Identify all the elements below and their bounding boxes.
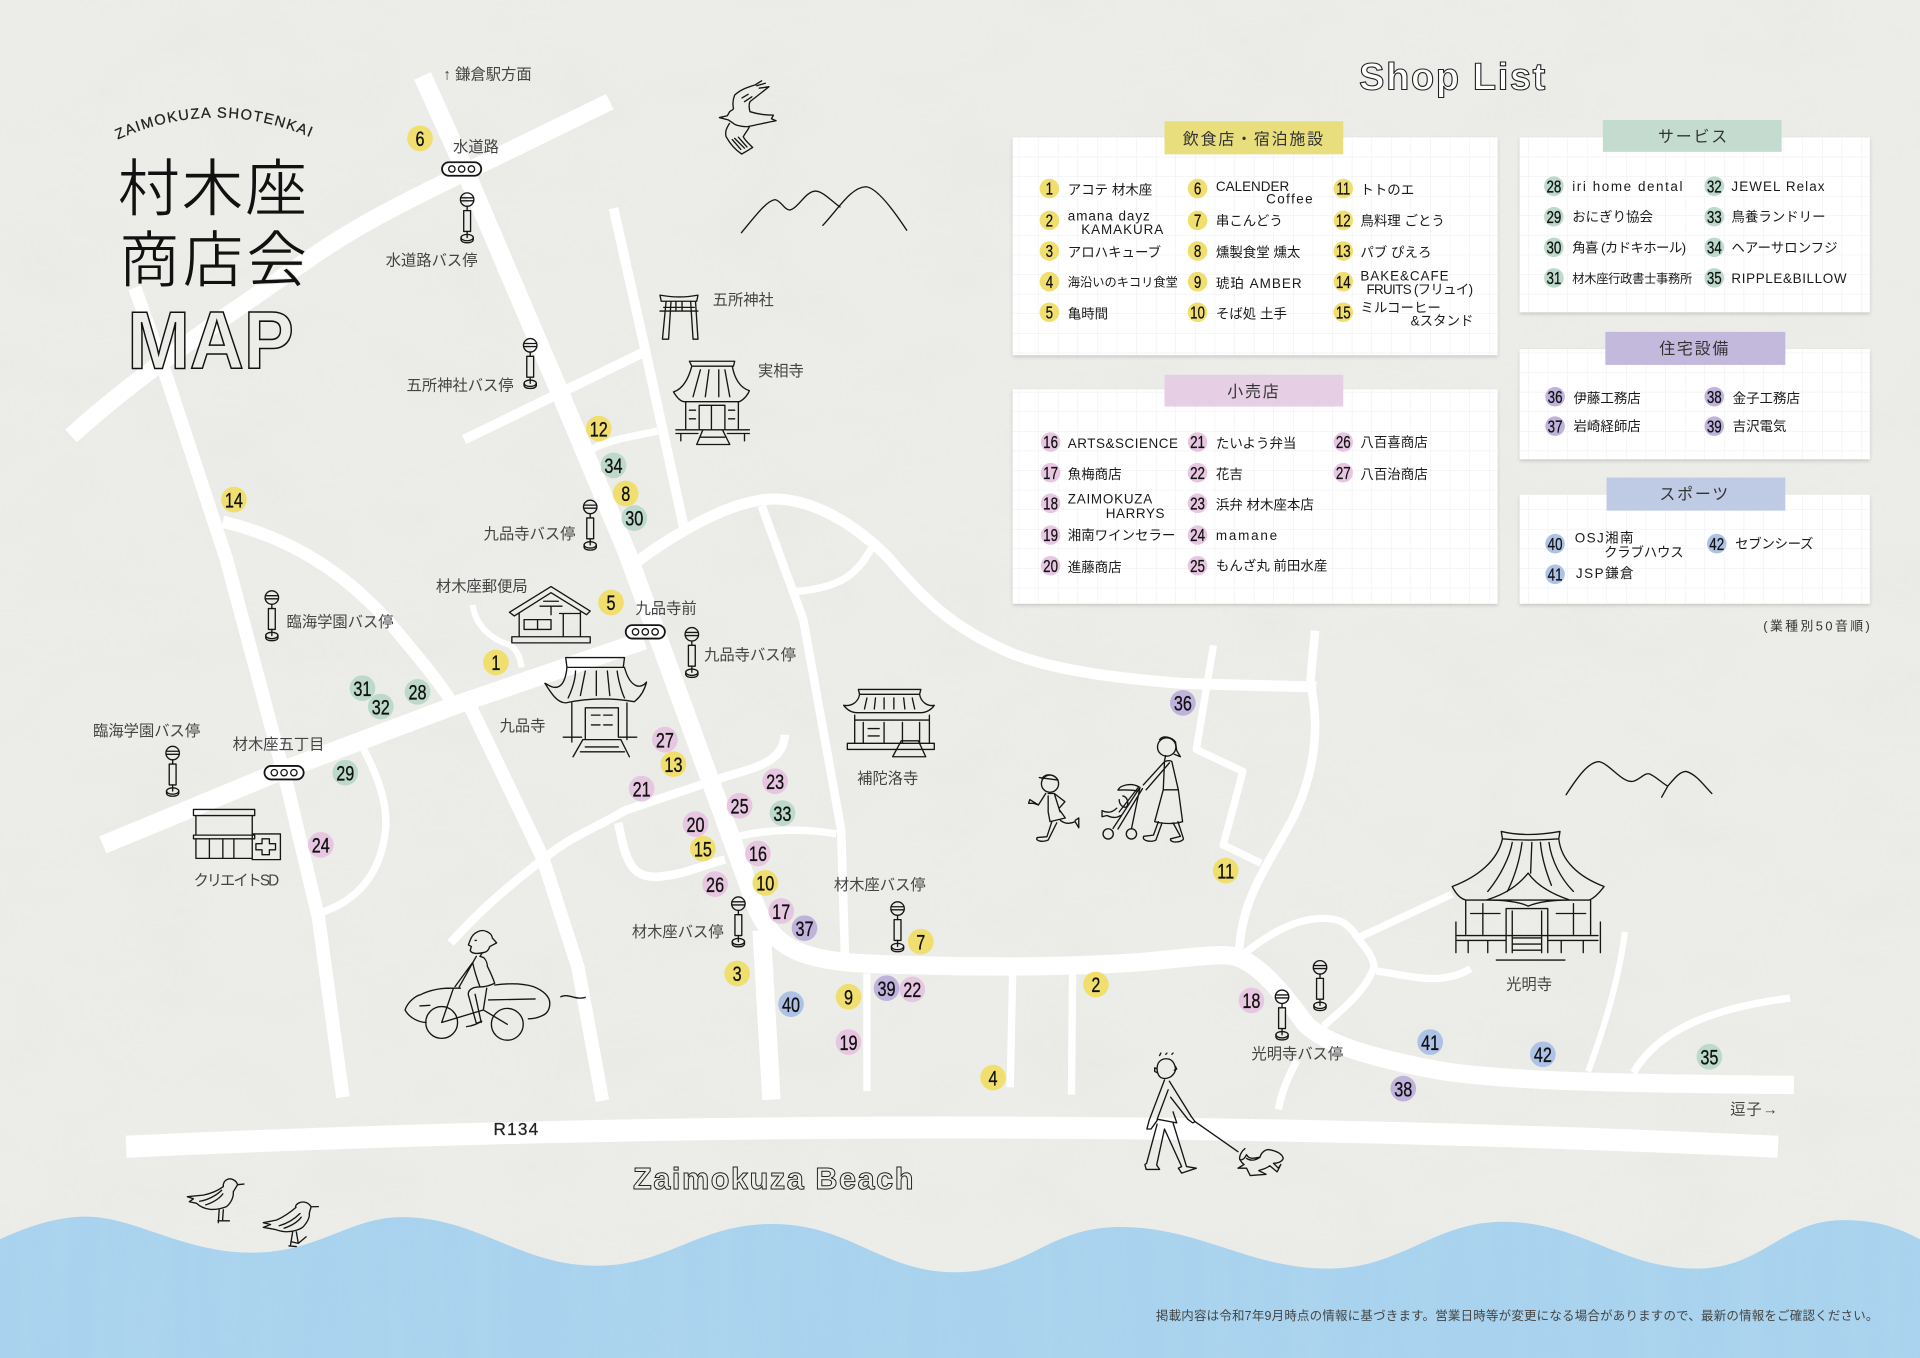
- label: 臨海学園バス停: [93, 723, 200, 740]
- marker 18: [1239, 988, 1264, 1013]
- marker 9: 9: [844, 986, 853, 1009]
- item 18: ZAIMOKUZA: [1068, 491, 1152, 506]
- tape heading: 住宅設備: [1659, 340, 1730, 358]
- item 26: [1333, 432, 1428, 453]
- label: 九品寺バス停: [704, 647, 796, 664]
- marker 28: 28: [409, 681, 427, 704]
- marker 22: 22: [903, 978, 921, 1002]
- marker 39: [874, 975, 899, 1001]
- traffic signal: 材木座五丁目: [264, 766, 304, 779]
- item 2: 2: [1046, 212, 1053, 231]
- label: 逗子→: [1730, 1101, 1778, 1118]
- icon: shorebird left: [187, 1179, 244, 1223]
- tape heading: [1607, 478, 1785, 511]
- icon: drugstore: [193, 809, 280, 860]
- item 40: [1545, 530, 1684, 560]
- marker 10: 10: [756, 872, 774, 895]
- tape heading: スポーツ: [1659, 486, 1730, 504]
- marker 3: 3: [733, 962, 742, 986]
- marker 32: 32: [372, 695, 390, 719]
- marker 36: 36: [1174, 692, 1192, 715]
- label: 九品寺: [500, 718, 545, 735]
- item 11: トトのエ: [1360, 183, 1414, 198]
- icon: running child: [1029, 775, 1079, 841]
- marker 16: [745, 841, 771, 866]
- label: 臨海学園バス停: [287, 614, 394, 631]
- label: 補陀洛寺: [857, 771, 918, 788]
- map number markers: [221, 126, 1722, 1101]
- item 41: [1545, 565, 1634, 585]
- icon: 実相寺 temple: [673, 361, 749, 445]
- item 26: 八百喜商店: [1360, 435, 1428, 450]
- icon: shorebird right: [263, 1202, 318, 1247]
- item 9: 琥珀 AMBER: [1216, 276, 1302, 291]
- label: 材木座バス停: [632, 924, 724, 941]
- item 19: [1041, 525, 1175, 546]
- item 9: [1188, 272, 1302, 292]
- item 36: 伊藤工務店: [1573, 391, 1641, 406]
- marker 42: 42: [1534, 1043, 1552, 1066]
- item 13: パブ ぴえろ: [1360, 244, 1431, 260]
- marker 27: [652, 727, 678, 752]
- marker 12: 12: [590, 417, 608, 441]
- marker 10: [752, 870, 778, 896]
- marker 17: 17: [772, 900, 790, 923]
- marker 15: [690, 836, 716, 861]
- item 30: 30: [1546, 239, 1561, 258]
- bus stop: 水道路: [460, 193, 474, 243]
- marker 31: [350, 675, 375, 701]
- item 5: 5: [1046, 304, 1053, 323]
- bus stop: 光明寺 west: [1275, 990, 1289, 1040]
- marker 29: [332, 760, 358, 786]
- item 29: [1544, 207, 1654, 227]
- tape heading: [1605, 332, 1785, 365]
- item 4: [1040, 272, 1178, 292]
- item 6: CALENDER: [1216, 179, 1289, 194]
- marker 19: 19: [840, 1031, 858, 1054]
- item 17: [1041, 463, 1122, 483]
- bus stop: 臨海学園 east: [265, 591, 279, 641]
- road label R134: R134: [493, 1119, 539, 1139]
- item 15: [1333, 300, 1473, 329]
- icon: walker with dog: [1145, 1053, 1283, 1176]
- item 7: 串こんどう: [1216, 213, 1283, 228]
- item 39: 39: [1707, 418, 1722, 437]
- sea texture: [0, 1217, 1920, 1358]
- bus stop: 光明寺 east: [1313, 961, 1327, 1011]
- title: 商店会: 商店会: [119, 227, 310, 295]
- marker 8: [613, 481, 639, 506]
- item 23: 23: [1190, 495, 1205, 514]
- item 9: 9: [1194, 273, 1201, 292]
- item 14: BAKE&CAFE: [1360, 268, 1449, 283]
- marker 5: [598, 590, 624, 615]
- marker 36: [1170, 690, 1196, 716]
- title block: [114, 107, 313, 387]
- item 27: 八百治商店: [1360, 467, 1428, 482]
- item 38: 金子工務店: [1733, 391, 1800, 406]
- marker 9: [836, 984, 861, 1010]
- bus stop: 臨海学園 west: [166, 746, 179, 796]
- traffic signal: 九品寺前: [626, 625, 665, 639]
- item 42: 42: [1709, 535, 1724, 554]
- marker 11: 11: [1217, 859, 1234, 883]
- item 27: [1333, 463, 1428, 483]
- item 4: 4: [1046, 273, 1054, 292]
- item 33: [1704, 207, 1826, 227]
- item 18: [1041, 491, 1165, 521]
- item 24: [1188, 525, 1277, 546]
- item 25: [1188, 556, 1327, 576]
- item 16: [1041, 432, 1178, 453]
- item 15: &スタンド: [1411, 314, 1473, 329]
- item 35: 35: [1707, 270, 1722, 289]
- item 1: 1: [1046, 180, 1053, 199]
- marker 21: 21: [633, 777, 651, 801]
- marker 14: 14: [225, 488, 243, 512]
- map place labels: [93, 67, 1778, 1139]
- marker 30: [621, 505, 647, 531]
- item 30: 角喜 (カドキホール): [1572, 240, 1686, 255]
- label: 光明寺バス停: [1251, 1046, 1343, 1063]
- item 36: 36: [1548, 388, 1563, 407]
- icon: parent with stroller: [1102, 737, 1183, 842]
- item 3: [1040, 241, 1161, 262]
- item 13: [1333, 241, 1431, 262]
- icon: mountains north: [741, 187, 907, 233]
- panel: 飲食店・宿泊施設: [1013, 121, 1498, 355]
- item 1: [1040, 179, 1152, 199]
- item 15: 15: [1336, 304, 1351, 323]
- label: 材木座郵便局: [436, 578, 528, 595]
- item 19: 19: [1043, 527, 1058, 546]
- marker 32: [368, 694, 394, 719]
- item 21: たいよう弁当: [1216, 436, 1296, 451]
- item 1: アコテ 材木座: [1068, 183, 1152, 198]
- item 12: [1333, 211, 1445, 231]
- marker 20: 20: [686, 813, 705, 836]
- marker 28: [405, 679, 430, 705]
- marker 38: 38: [1394, 1077, 1412, 1101]
- label: 水道路: [453, 139, 499, 156]
- bus stop: 九品寺 west: [583, 500, 597, 550]
- item 7: 7: [1194, 212, 1201, 231]
- marker 16: 16: [749, 842, 767, 866]
- bus stop: 材木座 west: [732, 897, 745, 947]
- item 23: [1188, 493, 1314, 514]
- item 26: 26: [1336, 434, 1351, 453]
- item 29: おにぎり協会: [1572, 210, 1654, 225]
- item 32: JEWEL Relax: [1731, 179, 1825, 194]
- bus stop: 材木座 east: [891, 902, 904, 952]
- item 39: [1704, 416, 1786, 437]
- item 15: ミルコーヒー: [1360, 300, 1441, 315]
- marker 6: [407, 126, 433, 151]
- marker 26: [702, 871, 728, 897]
- label: 九品寺前: [636, 600, 697, 617]
- icon: 補陀洛寺 temple: [844, 689, 934, 757]
- marker 2: 2: [1091, 973, 1100, 997]
- marker 6: 6: [415, 127, 425, 151]
- marker 31: 31: [353, 677, 371, 700]
- item 3: アロハキューブ: [1068, 244, 1161, 260]
- heading: Zaimokuza Beach: Zaimokuza Beach: [633, 1162, 913, 1196]
- item 27: 27: [1336, 464, 1351, 483]
- marker 24: [308, 832, 334, 858]
- item 34: ヘアーサロンフジ: [1731, 240, 1838, 255]
- item 37: 37: [1548, 418, 1563, 437]
- marker 34: [601, 452, 626, 478]
- marker 13: [661, 751, 686, 777]
- item 5: [1040, 302, 1108, 323]
- label: 材木座五丁目: [233, 736, 324, 753]
- item 8: 8: [1194, 243, 1201, 262]
- icon: 光明寺 temple: [1452, 831, 1604, 960]
- item 10: 10: [1190, 304, 1205, 323]
- item 10: [1188, 302, 1287, 323]
- item 24: mamane: [1216, 528, 1277, 543]
- item 36: [1545, 387, 1641, 407]
- label: 材木座バス停: [834, 877, 926, 894]
- marker 37: 37: [795, 917, 814, 940]
- item 2: [1040, 208, 1163, 237]
- item 6: 6: [1194, 180, 1201, 199]
- item 5: 亀時間: [1068, 306, 1108, 321]
- marker 1: [483, 650, 509, 675]
- item 11: [1333, 179, 1414, 199]
- item 40: クラブハウス: [1604, 544, 1684, 560]
- marker 37: [792, 915, 817, 941]
- item 14: FRUITS (フリュイ): [1367, 282, 1473, 297]
- item 25: もんざ丸 前田水産: [1216, 558, 1327, 574]
- item 18: 18: [1043, 495, 1058, 514]
- item 30: [1544, 238, 1686, 258]
- label: 五所神社: [713, 292, 774, 309]
- item 12: 12: [1336, 212, 1351, 231]
- item 22: 花吉: [1216, 467, 1243, 482]
- marker 7: [908, 929, 934, 955]
- item 21: [1188, 432, 1296, 453]
- marker 4: [980, 1065, 1006, 1090]
- item 13: 13: [1336, 243, 1351, 262]
- marker 40: 40: [782, 993, 800, 1016]
- item 28: 28: [1546, 178, 1561, 197]
- icon: torii gate: [660, 295, 698, 339]
- marker 30: 30: [625, 507, 643, 530]
- item 31: [1544, 268, 1692, 289]
- item 40: 40: [1548, 535, 1563, 554]
- road network: [71, 76, 1794, 1147]
- item 37: 岩崎経師店: [1573, 419, 1641, 434]
- marker 4: 4: [989, 1066, 998, 1090]
- label: 実相寺: [758, 363, 804, 380]
- item 3: 3: [1046, 243, 1053, 262]
- label: 水道路バス停: [386, 253, 478, 270]
- label: 光明寺: [1506, 976, 1552, 993]
- item 37: [1545, 416, 1641, 437]
- item 22: 22: [1190, 464, 1205, 483]
- marker 42: [1530, 1041, 1556, 1067]
- label: 五所神社バス停: [407, 378, 514, 395]
- item 14: 14: [1336, 273, 1351, 292]
- title: arc text: ZAIMOKUZA SHOTENKAI: [114, 107, 313, 140]
- item 2: KAMAKURA: [1081, 222, 1163, 237]
- marker 23: [762, 768, 788, 794]
- marker 14: [221, 487, 247, 512]
- item 35: [1704, 268, 1847, 289]
- marker 41: 41: [1421, 1031, 1439, 1054]
- marker 21: [629, 776, 654, 801]
- icon: flying bird: [719, 81, 776, 154]
- tape heading: [1603, 120, 1782, 152]
- item 34: [1704, 238, 1838, 258]
- marker 17: [768, 898, 794, 924]
- item 22: [1188, 463, 1243, 483]
- item 6: Coffee: [1266, 191, 1313, 206]
- item 34: 34: [1707, 239, 1722, 258]
- item 41: JSP鎌倉: [1576, 566, 1634, 581]
- item 8: 燻製食堂 燻太: [1216, 245, 1301, 260]
- marker 13: 13: [664, 753, 683, 776]
- note: sort order: (業種別50音順): [1763, 619, 1870, 634]
- marker 40: [778, 991, 804, 1017]
- item 33: 鳥養ランドリー: [1731, 209, 1826, 225]
- panel: サービス: [1520, 120, 1870, 312]
- marker 3: [724, 961, 750, 986]
- item 42: セブンシーズ: [1735, 536, 1813, 552]
- item 28: iri home dental: [1572, 179, 1682, 194]
- traffic signal: 水道路: [442, 162, 481, 176]
- item 24: 24: [1190, 527, 1205, 546]
- item 38: [1704, 387, 1800, 407]
- tape heading: サービス: [1658, 128, 1729, 146]
- icon: cyclist with surfboard: [405, 931, 585, 1040]
- tape heading: [1164, 375, 1343, 407]
- item 6: [1188, 179, 1313, 206]
- item 42: [1707, 534, 1813, 554]
- item 25: 25: [1190, 557, 1205, 576]
- marker 2: [1083, 972, 1109, 997]
- marker 27: 27: [656, 728, 674, 752]
- item 32: 32: [1707, 178, 1722, 197]
- item 2: amana dayz: [1068, 208, 1150, 223]
- item 20: 進藤商店: [1068, 560, 1122, 575]
- item 32: [1704, 176, 1825, 197]
- marker 24: 24: [312, 834, 330, 857]
- item 12: 鳥料理 ごとう: [1360, 213, 1445, 228]
- tape heading: 小売店: [1227, 383, 1280, 401]
- item 19: 湘南ワインセラー: [1068, 528, 1175, 543]
- item 28: [1544, 176, 1682, 197]
- item 14: [1333, 268, 1473, 297]
- bus stop: 九品寺 east: [685, 628, 699, 677]
- item 39: 吉沢電気: [1733, 419, 1786, 434]
- item 38: 38: [1707, 388, 1722, 407]
- item 33: 33: [1707, 208, 1722, 227]
- marker 12: [586, 416, 612, 441]
- icon: post office: [509, 587, 590, 643]
- marker 25: 25: [731, 794, 749, 818]
- marker 8: 8: [621, 482, 630, 506]
- item 10: そば処 土手: [1216, 306, 1287, 321]
- marker 33: 33: [773, 802, 791, 825]
- marker 35: 35: [1700, 1046, 1718, 1069]
- panel: スポーツ: [1520, 478, 1870, 604]
- marker 11: [1213, 858, 1239, 883]
- sea waves: [0, 1217, 1920, 1358]
- marker 7: 7: [916, 930, 925, 954]
- item 31: 材木座行政書士事務所: [1572, 272, 1692, 286]
- marker 18: 18: [1242, 989, 1260, 1013]
- item 31: 31: [1546, 270, 1561, 289]
- marker 39: 39: [877, 977, 896, 1000]
- item 8: [1188, 241, 1301, 262]
- marker 22: [899, 977, 925, 1002]
- marker 26: 26: [706, 873, 724, 896]
- title: MAP: MAP: [127, 296, 294, 387]
- item 21: 21: [1190, 434, 1205, 453]
- item 4: 海沿いのキコリ食堂: [1068, 276, 1178, 290]
- footnote: 掲載内容は令和7年9月時点の情報に基づきます。営業日時等が変更になる場合がありますので、最新の情報をご確認ください。: [1156, 1308, 1878, 1323]
- marker 34: 34: [604, 454, 623, 478]
- item 16: ARTS&SCIENCE: [1068, 436, 1178, 451]
- panel: 小売店: [1013, 375, 1498, 604]
- marker 15: 15: [694, 837, 712, 861]
- icon: 九品寺 temple: [545, 658, 647, 757]
- marker 23: 23: [766, 770, 784, 793]
- tape heading: 飲食店・宿泊施設: [1183, 131, 1325, 149]
- marker 1: 1: [491, 651, 500, 675]
- heading: Shop List: Shop List: [1359, 56, 1546, 98]
- item 17: 17: [1043, 464, 1058, 483]
- item 11: 11: [1336, 180, 1350, 199]
- marker 20: [683, 811, 708, 837]
- item 41: 41: [1548, 566, 1563, 585]
- marker 33: [770, 800, 795, 826]
- marker 25: [727, 793, 752, 819]
- bus stop: 五所神社: [523, 339, 537, 388]
- item 16: 16: [1043, 434, 1058, 453]
- item 29: 29: [1546, 208, 1561, 227]
- marker 19: [836, 1029, 861, 1055]
- item 35: RIPPLE&BILLOW: [1731, 271, 1847, 286]
- item 20: [1041, 556, 1122, 576]
- title: 村木座: 村木座: [118, 155, 309, 225]
- item 23: 浜弁 材木座本店: [1216, 497, 1314, 512]
- item 17: 魚梅商店: [1068, 467, 1122, 482]
- marker 35: [1697, 1044, 1722, 1070]
- tape heading: [1164, 121, 1343, 154]
- item 20: 20: [1043, 557, 1058, 576]
- item 7: [1188, 211, 1283, 231]
- marker 41: [1417, 1029, 1443, 1055]
- icon: mountains south: [1566, 762, 1712, 797]
- marker 29: 29: [336, 761, 354, 785]
- item 40: OSJ湘南: [1575, 530, 1633, 545]
- label: 九品寺バス停: [484, 526, 575, 543]
- marker 5: 5: [607, 591, 616, 615]
- item 18: HARRYS: [1106, 506, 1165, 521]
- label: クリエイトSD: [193, 872, 279, 889]
- label: ↑ 鎌倉駅方面: [443, 67, 532, 84]
- marker 38: [1390, 1076, 1416, 1101]
- panel: 住宅設備: [1520, 332, 1870, 459]
